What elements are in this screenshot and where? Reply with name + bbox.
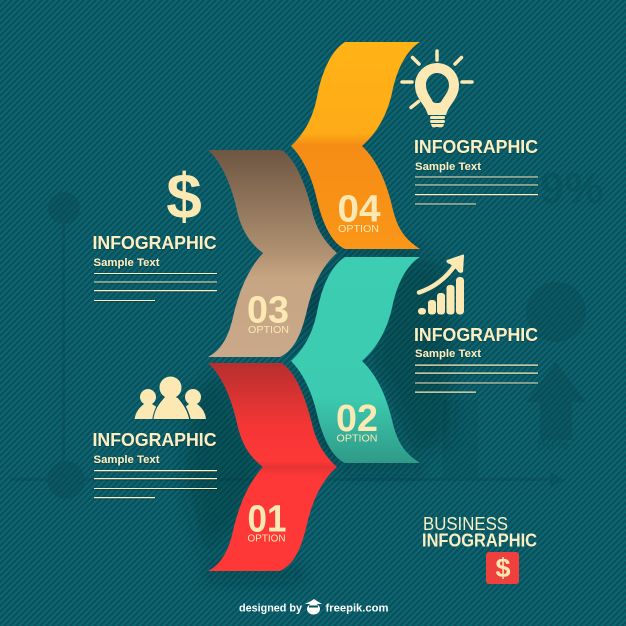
number 04: 04 [338, 188, 380, 230]
ribbon 02: teal [291, 257, 420, 463]
block: top-right text: Sample Text [415, 161, 481, 173]
block: middle-right text: Sample Text [415, 348, 481, 360]
ribbon 01: red [208, 363, 337, 571]
block: middle-right text: INFOGRAPHIC [414, 324, 538, 345]
block: top-right text [414, 136, 538, 204]
number 04: OPTION [338, 223, 379, 235]
number 02: 02 [336, 398, 378, 440]
icon: red dollar badge [486, 552, 519, 584]
icon: light bulb [402, 51, 472, 127]
ribbon 04: orange [291, 42, 420, 249]
icon: growth chart [418, 254, 464, 314]
title: business infographic [422, 514, 537, 550]
number 03: OPTION [248, 324, 289, 336]
soft shadows behind ribbons [185, 150, 452, 578]
block: middle-right text [414, 324, 538, 393]
block: top-right text: INFOGRAPHIC [414, 136, 538, 157]
icon: dollar: $ [166, 160, 202, 232]
ghost background chart: 9% [540, 164, 604, 213]
ghost background chart [10, 164, 604, 499]
footer credit [239, 599, 389, 614]
footer credit: designed by [239, 602, 303, 614]
title: business infographic: BUSINESS [423, 514, 508, 534]
block: lower-left text: Sample Text [94, 454, 160, 466]
number 01: OPTION [248, 532, 286, 544]
block: lower-left text [92, 429, 217, 498]
icon: people [134, 376, 206, 420]
number 03: 03 [247, 290, 289, 332]
icon: red dollar badge: $ [495, 553, 511, 583]
footer credit: freepik.com [326, 602, 389, 614]
block: upper-left text: INFOGRAPHIC [92, 232, 216, 253]
block: lower-left text: INFOGRAPHIC [92, 429, 216, 450]
number 01: 01 [248, 498, 286, 540]
title: business infographic: INFOGRAPHIC [422, 530, 537, 550]
icon: freepik mascot [305, 599, 322, 614]
block: upper-left text: Sample Text [94, 257, 160, 269]
ribbon 03: tan [208, 150, 337, 357]
block: upper-left text [92, 232, 217, 301]
number 02: OPTION [336, 432, 378, 444]
ghost background chart: 80% [537, 437, 569, 454]
